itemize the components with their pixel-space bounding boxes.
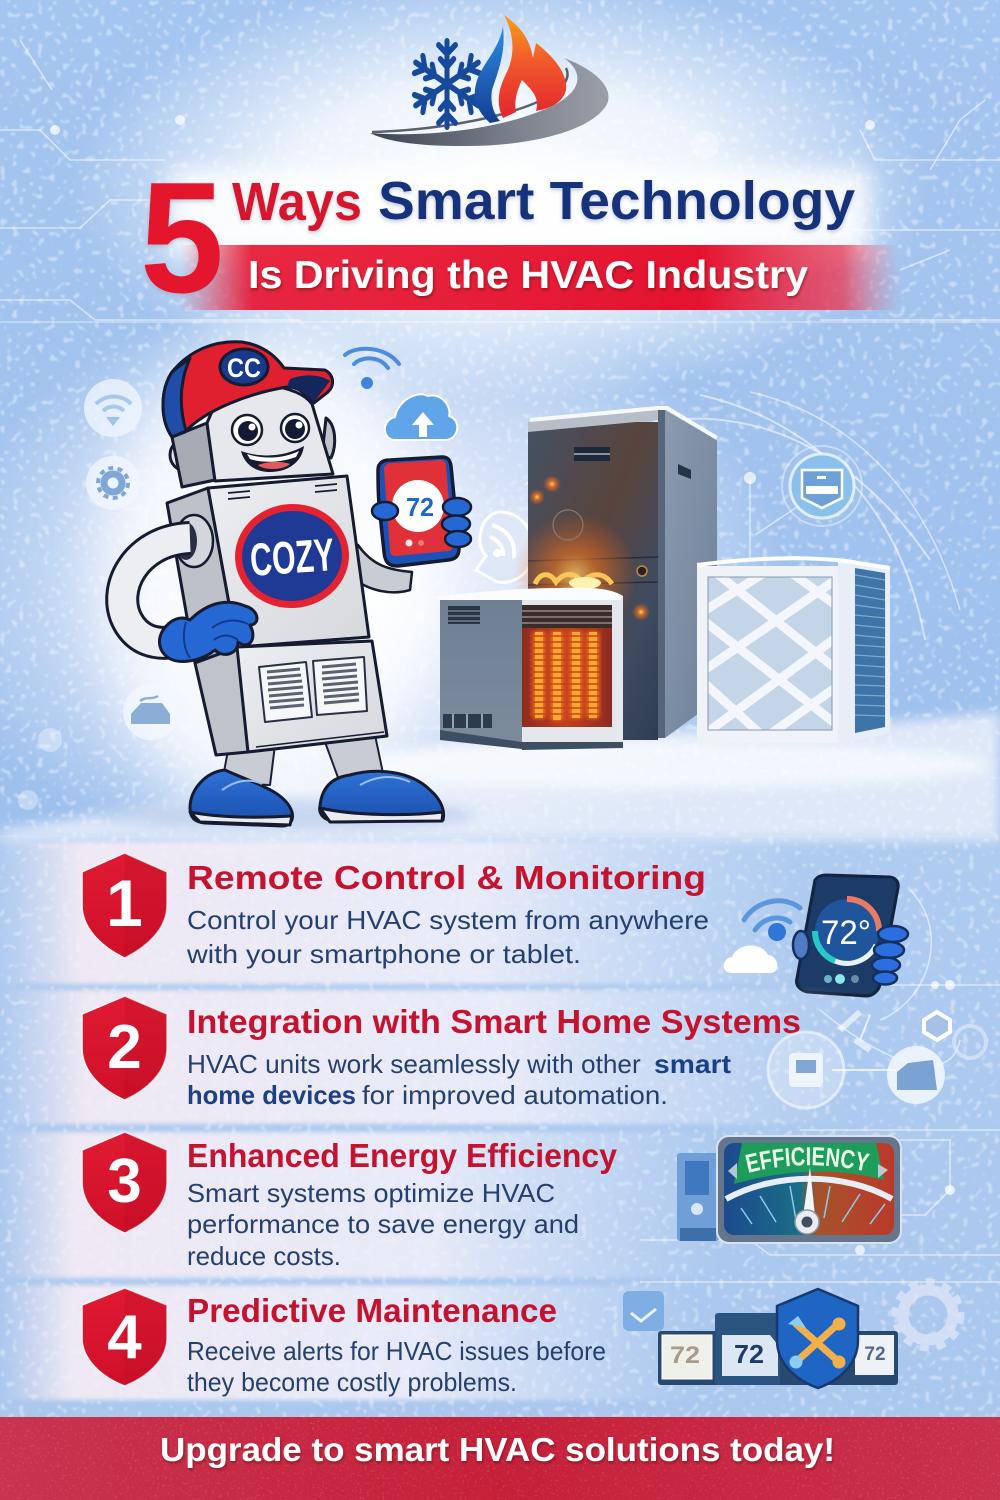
COZY logo: [232, 500, 352, 612]
step 2: [0, 990, 986, 1124]
shield 1: [82, 853, 167, 958]
shield 3: [82, 1132, 167, 1233]
description: with your smartphone or tablet.: [186, 939, 581, 969]
COZY logo: COZY: [248, 528, 336, 586]
description: smart: [654, 1049, 731, 1079]
title red band: [180, 245, 900, 310]
subtitle: Is Driving the HVAC Industry: [248, 254, 808, 297]
row panel: [0, 990, 850, 1124]
heading: Enhanced Energy Efficiency: [187, 1137, 618, 1174]
row panel: [0, 842, 800, 984]
thumb and fingers: [372, 498, 471, 547]
shield 1: 1: [106, 866, 143, 940]
icon: smart home devices: [768, 1012, 986, 1108]
icon: wifi and cloud: [724, 901, 800, 973]
description: home devices: [187, 1080, 356, 1110]
mascot shoulder joint: [175, 515, 213, 567]
description: Control your HVAC system from anywhere: [187, 905, 709, 935]
floating tech icons: [84, 379, 862, 740]
mascot legs: [222, 735, 384, 785]
left heater unit: [436, 588, 623, 750]
description: performance to save energy and: [187, 1209, 579, 1239]
title: [140, 150, 900, 326]
mascot phone: [372, 457, 471, 566]
call to action banner: [0, 1417, 1000, 1500]
icon: alert message: [623, 1291, 664, 1331]
icon: orange flame: [499, 15, 566, 118]
right filter unit: [696, 556, 890, 743]
hand: [793, 926, 908, 984]
heading: Remote Control & Monitoring: [187, 859, 706, 896]
icon: thermostat panels with shield: [658, 1289, 898, 1388]
icon: thermostat panels with shield: 72: [864, 1344, 886, 1365]
mascot right arm: [350, 545, 412, 592]
step 1: [0, 842, 908, 996]
shield 2: [82, 996, 167, 1100]
cloud upload icon: [385, 394, 457, 440]
mascot shoes: [190, 770, 444, 826]
heading: Predictive Maintenance: [187, 1292, 557, 1329]
shield 2: 2: [107, 1013, 142, 1082]
gauge label: [748, 1165, 868, 1173]
icon: snowflake: [412, 41, 482, 127]
icon: swoosh: [370, 58, 609, 146]
icon: thermostat panels with shield: 72: [670, 1342, 700, 1369]
title white backing: [170, 170, 870, 255]
icon: gear: [895, 1282, 961, 1348]
step 3: [10, 1130, 902, 1280]
icon: wifi signal in speech bubble: [476, 512, 534, 582]
description: Receive alerts for HVAC issues before: [187, 1336, 606, 1366]
row panel: [0, 1132, 720, 1278]
wifi icon: [345, 349, 399, 389]
row panel: [0, 1285, 700, 1400]
brand logo: snowflake and flame: [370, 15, 609, 146]
mascot vents: [259, 657, 367, 722]
icon: gear circle: [86, 456, 140, 510]
mascot cap: [163, 342, 333, 437]
mascot face: [232, 414, 309, 472]
HVAC units: [436, 408, 890, 770]
tall furnace: [513, 408, 717, 740]
description: HVAC units work seamlessly with other: [187, 1049, 648, 1079]
mascot torso: [167, 476, 387, 755]
description: they become costly problems.: [187, 1367, 517, 1397]
icon: smartphone thermostat: [793, 875, 908, 996]
description: reduce costs.: [187, 1241, 341, 1271]
shield 4: 4: [107, 1303, 142, 1372]
words: Smart Technology: Smart Technology: [378, 171, 855, 231]
mascot head: [170, 385, 335, 487]
shield 3: 3: [107, 1147, 142, 1216]
snowy ground: [0, 712, 1000, 840]
numeral 5: 5: [140, 150, 224, 326]
heading: Integration with Smart Home Systems: [187, 1003, 801, 1040]
shield 4: [82, 1288, 167, 1386]
icon: smartphone thermostat: 72°: [821, 914, 871, 952]
description: Smart systems optimize HVAC: [187, 1178, 555, 1208]
word: Ways: Ways: [232, 172, 362, 232]
icon: blue flame: [475, 27, 504, 123]
icon: efficiency gauge: [677, 1135, 902, 1244]
step 4: [0, 1282, 961, 1400]
needle: [803, 1167, 815, 1216]
mascot left arm: [122, 538, 190, 643]
icon: thermostat panels with shield: 72: [734, 1339, 764, 1369]
call to action text: Upgrade to smart HVAC solutions today!: [160, 1431, 835, 1468]
mascot: [122, 342, 471, 826]
mascot phone: 72: [406, 492, 434, 522]
mascot left glove: [159, 602, 257, 661]
icon: wall controller circle: [782, 446, 862, 526]
description: for improved automation.: [362, 1080, 668, 1110]
icon: efficiency gauge: EFFICIENCY: [745, 1147, 870, 1173]
icon: wifi circle: [84, 379, 142, 437]
icon: car circle: [123, 684, 179, 740]
mascot cap: CC: [227, 353, 261, 383]
